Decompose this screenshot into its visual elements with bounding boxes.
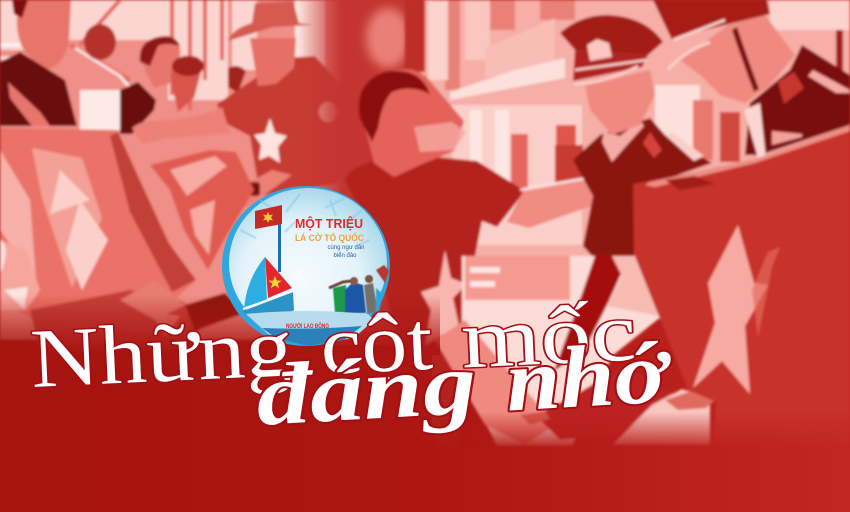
title line one: mốc bbox=[459, 286, 638, 386]
flag star bbox=[693, 225, 768, 394]
title line two bbox=[254, 324, 675, 445]
bottom fade right bbox=[430, 412, 850, 450]
lower flag folds bbox=[30, 290, 210, 352]
sea waves bbox=[246, 311, 374, 346]
photo: volunteers with flags on the left bbox=[0, 0, 349, 352]
flag pole bbox=[278, 222, 281, 272]
man with hat: body, arm, star bbox=[217, 56, 349, 196]
small text in badge second line: biển đảo bbox=[333, 252, 357, 259]
officer right face and cap bbox=[680, 15, 795, 103]
hat bbox=[250, 38, 296, 86]
officer left uniform bbox=[573, 118, 712, 296]
icon: people saluting bbox=[329, 265, 389, 313]
title line one: Những bbox=[29, 301, 295, 406]
icon: water spray texture bbox=[240, 194, 370, 246]
subheading in badge: LÁ CỜ TỔ QUỐC bbox=[295, 232, 364, 243]
photo: border guards and building on the right bbox=[345, 0, 850, 457]
title bbox=[29, 286, 675, 445]
bottom solid right bbox=[430, 450, 850, 512]
title line two: đáng bbox=[254, 335, 479, 445]
lower center pale zone bbox=[462, 256, 662, 446]
bottom fade left bbox=[0, 295, 440, 355]
middle solid band bbox=[342, 0, 432, 345]
middle fade band bbox=[298, 0, 342, 345]
newspaper name: NGƯỜI LAO ĐỘNG bbox=[286, 321, 329, 330]
bottom solid left bbox=[0, 355, 432, 512]
icon: Vietnamese flag bbox=[255, 205, 282, 229]
man behind bbox=[84, 24, 116, 60]
small text in badge: cùng ngư dân bbox=[327, 245, 365, 251]
man at left bbox=[17, 0, 71, 70]
title line one bbox=[29, 286, 638, 406]
flag bundles bbox=[0, 128, 196, 320]
center man bbox=[345, 157, 525, 451]
big flag held bbox=[633, 127, 850, 457]
officer right uniform bbox=[745, 45, 850, 155]
icon: sailboat bbox=[243, 257, 294, 316]
foliage glow bbox=[366, 8, 410, 68]
man in dark shirt bbox=[143, 36, 180, 88]
heading in badge: MỘT TRIỆU bbox=[295, 216, 363, 231]
officer left face and cap bbox=[585, 70, 655, 135]
logo badge: Một triệu lá cờ Tổ quốc bbox=[222, 186, 390, 346]
title line two: nhớ bbox=[503, 324, 675, 431]
title line one: cột bbox=[318, 295, 434, 393]
